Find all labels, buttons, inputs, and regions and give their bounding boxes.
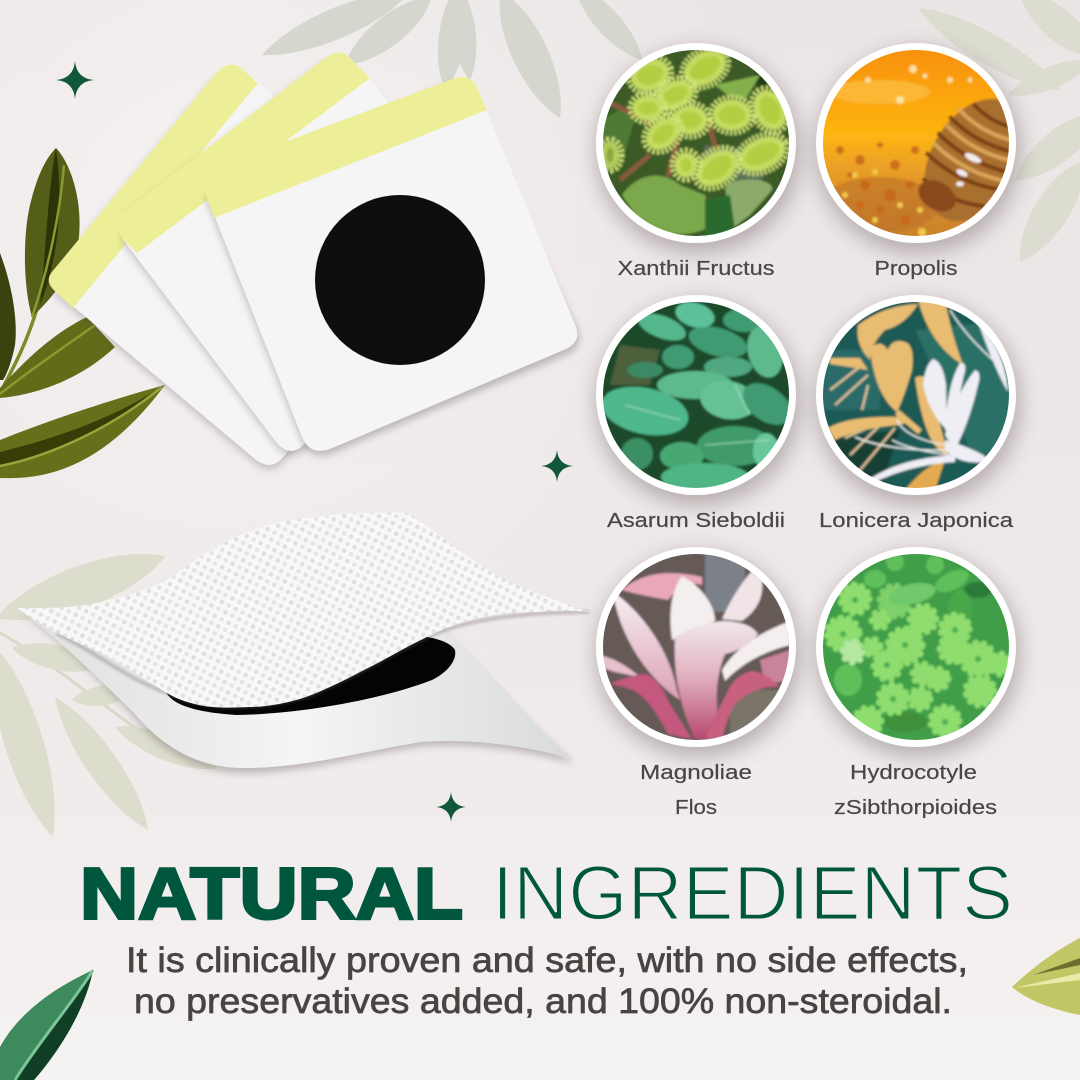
upper woven sheet shadow (57, 612, 589, 707)
title: INGREDIENTS (492, 850, 1013, 936)
ingredient labels: Flos (675, 797, 717, 819)
ingredient labels: Lonicera Japonica (819, 510, 1014, 532)
subtitle: no preservatives added, and 100% non-steroidal. (134, 982, 952, 1021)
lower sheet (23, 613, 574, 768)
leaf: top (25, 148, 80, 317)
ingredient: Lonicera Japonica (815, 293, 1020, 505)
ingredient labels: Asarum Sieboldii (607, 510, 785, 532)
ingredient labels (607, 258, 1014, 819)
sparkle icons (56, 61, 573, 822)
photo: heart leaves (603, 302, 789, 488)
upper woven sheet (17, 513, 589, 708)
leaf: left edge (0, 253, 16, 380)
photo: pennywort (823, 554, 1009, 740)
black adhesive circle (315, 195, 485, 365)
leaf: middle (0, 317, 115, 398)
product: opened textured patch (17, 513, 589, 773)
decorative pale leaves: lower left (0, 537, 222, 842)
photo: magnolia (603, 554, 789, 740)
front patch (204, 77, 579, 455)
title: NATURAL (80, 854, 463, 934)
ingredient: Asarum Sieboldii (595, 293, 800, 505)
decorative leaf: bottom right (1012, 938, 1080, 1015)
ingredient labels: Hydrocotyle (850, 762, 977, 784)
middle patch (117, 52, 460, 455)
ingredient: Magnoliae Flos (595, 545, 800, 757)
lower sheet shadow (23, 613, 574, 773)
subtitle (126, 941, 968, 1021)
ingredient labels: Propolis (874, 258, 958, 280)
black adhesive sliver (165, 636, 455, 715)
back patch (49, 65, 400, 469)
photo: burrs (603, 50, 789, 236)
photo: honey dipper (823, 50, 1009, 236)
decorative leaf: bottom left (0, 970, 93, 1080)
photo: honeysuckle (823, 302, 1009, 488)
ingredient: Hydrocotyle zSibthorpioides (815, 545, 1020, 757)
ingredient: Xanthii Fructus (595, 40, 800, 253)
leaf: bottom (0, 385, 165, 478)
subtitle: It is clinically proven and safe, with no side effects, (126, 941, 968, 980)
product: stack of three patches (49, 52, 579, 469)
ingredient labels: zSibthorpioides (834, 797, 997, 819)
decorative green leaves: left (0, 148, 165, 478)
decorative pale leaves: top right (910, 0, 1080, 271)
decorative pale leaves: top centre (256, 0, 651, 126)
ingredient labels: Xanthii Fructus (618, 258, 774, 280)
title (80, 850, 1013, 936)
ingredient labels: Magnoliae (640, 762, 752, 784)
ingredient: Propolis (815, 40, 1048, 253)
